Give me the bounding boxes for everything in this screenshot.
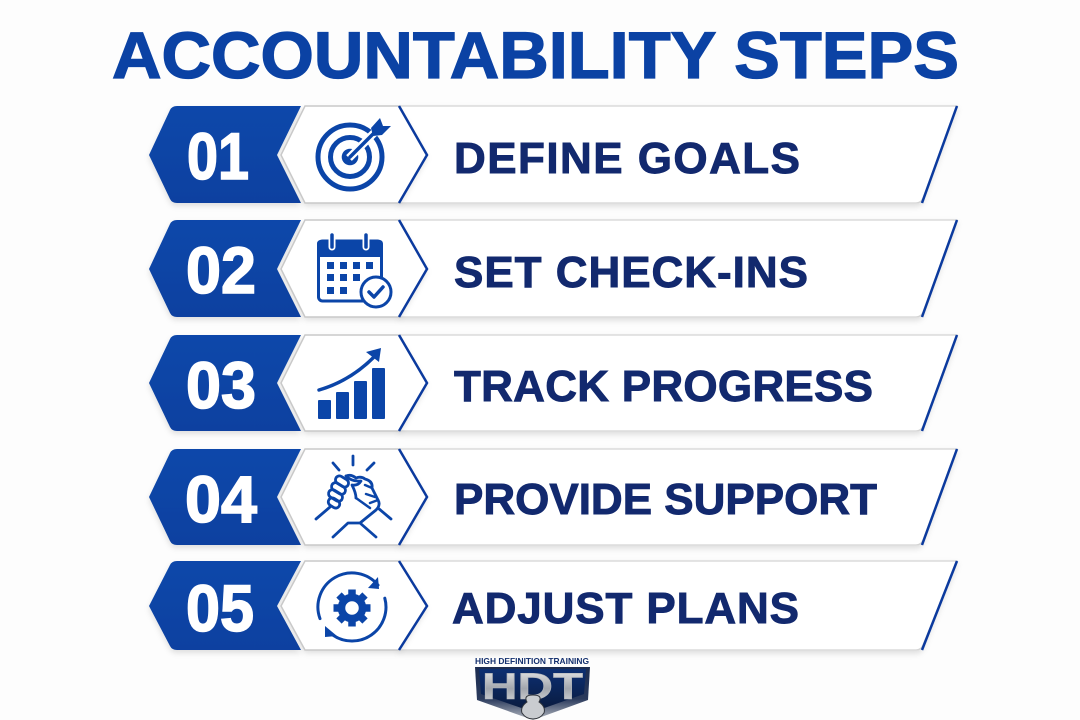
icon: calendar with check — [317, 235, 391, 307]
title: ACCOUNTABILITY STEPS — [112, 18, 959, 92]
shield — [475, 667, 590, 720]
number 05: 05 — [186, 571, 254, 645]
number 03: 03 — [186, 348, 256, 422]
icon hexagon — [281, 561, 427, 650]
label text: DEFINE GOALS — [454, 134, 800, 183]
icon: gear with cycle arrows — [318, 573, 386, 641]
label panel — [399, 561, 957, 650]
number 02: 02 — [186, 233, 256, 307]
number tab — [149, 106, 301, 203]
icon hexagon — [281, 220, 427, 317]
label panel — [399, 335, 957, 431]
label panel — [399, 449, 957, 545]
step 5: adjust plans — [149, 561, 957, 650]
icon hexagon — [281, 106, 427, 203]
label text: TRACK PROGRESS — [454, 362, 873, 411]
step 4: provide support — [149, 449, 957, 545]
label text: SET CHECK-INS — [454, 248, 808, 297]
step 1: define goals — [149, 106, 957, 203]
label text: PROVIDE SUPPORT — [454, 475, 877, 524]
label panel — [399, 220, 957, 317]
HDT letters: HDT — [482, 666, 584, 707]
icon: rising bar chart — [318, 348, 385, 419]
icon hexagon — [281, 335, 427, 431]
logo: HDT shield — [475, 656, 590, 720]
icon: clasped hands — [316, 456, 391, 537]
number 04: 04 — [185, 462, 257, 536]
icon hexagon — [281, 449, 427, 545]
number tab — [149, 449, 301, 545]
number tab — [149, 220, 301, 317]
step 3: track progress — [149, 335, 957, 431]
number tab — [149, 335, 301, 431]
kettlebell — [522, 695, 544, 719]
number 01: 01 — [187, 119, 249, 193]
icon: target with arrow — [318, 118, 391, 189]
number tab — [149, 561, 301, 650]
logo caption: HIGH DEFINITION TRAINING — [475, 656, 589, 666]
label text: ADJUST PLANS — [452, 584, 799, 633]
label panel — [399, 106, 957, 203]
step 2: set check-ins — [149, 220, 957, 317]
